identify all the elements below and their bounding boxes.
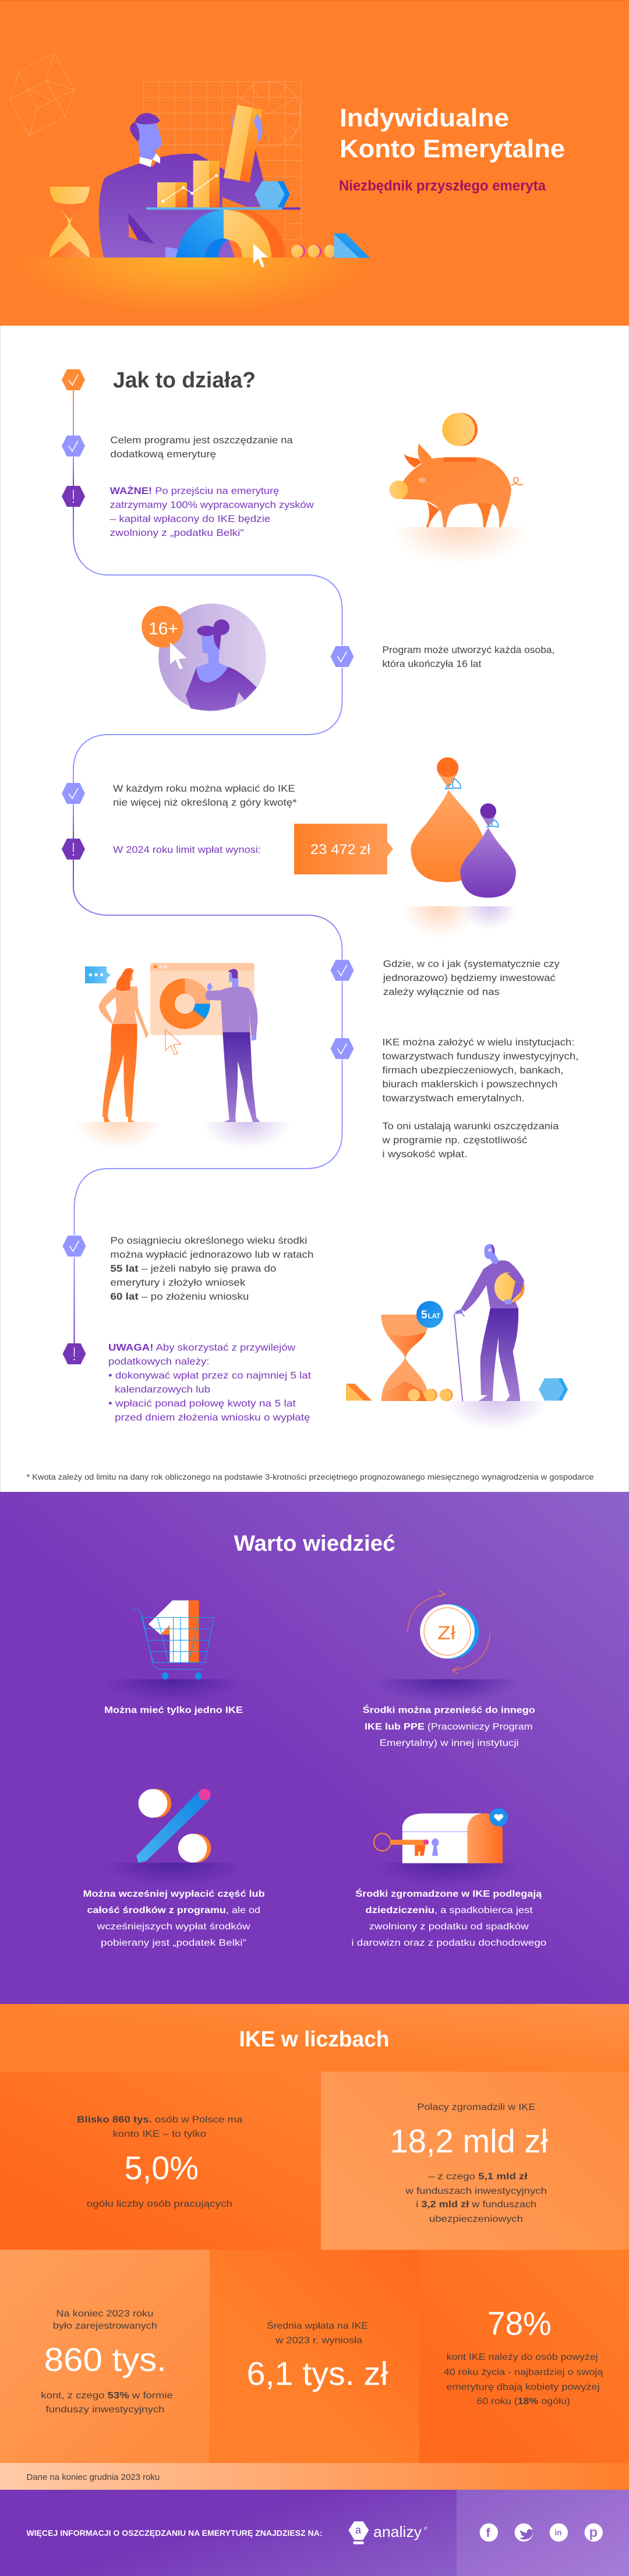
- cell: 18,2 mld zł: w funduszach inwestycyjnych: [405, 2186, 547, 2196]
- cell: 860 tys.: [0, 2250, 210, 2463]
- icon: check: [331, 646, 354, 667]
- cell: 78%: kont IKE należy do osób powyżej: [447, 2352, 598, 2362]
- cell: 6,1 tys. zł: w 2023 r. wyniosła: [275, 2336, 362, 2346]
- icon: chest with key: [373, 1808, 521, 1910]
- icon: check: [63, 1236, 86, 1257]
- text: limit: nie więcej niż określoną z góry kwotę*: [113, 797, 297, 808]
- cell: 5,0%: ogółu liczby osób pracujących: [87, 2199, 232, 2209]
- cell: 18,2 mld zł: i 3,2 mld zł w funduszach: [416, 2200, 536, 2210]
- text: cel programu: dodatkową emeryturę: [110, 449, 216, 460]
- icon: linkedin: [550, 2524, 568, 2542]
- text: gdzie inwestować: Gdzie, w co i jak (systematycznie czy: [383, 958, 560, 969]
- icon: coin transfer: [373, 1590, 521, 1726]
- source note: Dane na koniec grudnia 2023 roku: [27, 2472, 160, 2482]
- text: ważne: [110, 485, 314, 538]
- text: gdzie inwestować: zależy wyłącznie od nas: [383, 986, 500, 997]
- title: [340, 104, 565, 163]
- text: gdzie inwestować: jednorazowo) będziemy inwestować: [383, 972, 556, 983]
- cell: 78%: 60 roku ( 18% ogółu): [476, 2397, 570, 2406]
- icon: orange check hexagon: [62, 369, 85, 390]
- heading: Warto wiedzieć: [234, 1532, 395, 1556]
- header panel: [0, 0, 629, 373]
- cell: 860 tys.: Na koniec 2023 roku: [56, 2309, 153, 2319]
- text: gdzie inwestować: [383, 958, 560, 997]
- text: wypłata: emerytury i złożyło wniosek: [110, 1277, 246, 1288]
- text: instytucje: w programie np. częstotliwość: [381, 1135, 528, 1145]
- icon: number one in cart: [103, 1600, 245, 1726]
- icon: pinterest: [585, 2524, 603, 2542]
- heading: IKE w liczbach: [239, 2027, 389, 2052]
- text: transfer: Emerytalny) w innej instytucji: [380, 1738, 519, 1748]
- cell: 860 tys.: kont, z czego 53% w formie: [41, 2391, 173, 2401]
- text: wcześniejsza wypłata: całość środków z programu , ale od: [87, 1905, 260, 1915]
- cell: 78%: 78%: [487, 2305, 552, 2342]
- text: wypłata: 55 lat – jeżeli nabyło się prawa do: [110, 1263, 276, 1274]
- text: wcześniejsza wypłata: wcześniejszych wypłat środków: [96, 1922, 251, 1932]
- cell: 78%: 40 roku życia - najbardziej o swoją: [444, 2367, 603, 2377]
- illustration: woman 16+: [142, 604, 266, 711]
- text: kto może utworzyć: [382, 644, 554, 669]
- text: transfer: Środki można przenieść do innego: [363, 1705, 535, 1716]
- badge label 16+: 16+: [149, 619, 178, 638]
- badge label 5 lat: 5LAT: [421, 1309, 440, 1321]
- text: instytucje: towarzystwach emerytalnych.: [382, 1093, 525, 1104]
- logo: analizy.pl: a: [355, 2524, 362, 2536]
- text: dziedziczenie: zwolniony z podatku od spadków: [369, 1922, 529, 1932]
- cell: 18,2 mld zł: Polacy zgromadzili w IKE: [417, 2102, 535, 2112]
- text: instytucje: To oni ustalają warunki oszczędzania: [382, 1120, 559, 1131]
- text: wcześniejsza wypłata: [83, 1889, 265, 1948]
- text: dziedziczenie: [351, 1889, 546, 1948]
- icon: check: [331, 960, 354, 981]
- illustration: investor with charts: [99, 105, 301, 267]
- cell: 5,0%: konto IKE – to tylko: [113, 2129, 206, 2139]
- text: instytucje: biurach maklerskich i powszechnych: [382, 1079, 557, 1089]
- footer text: WIĘCEJ INFORMACJI O OSZCZĘDZANIU NA EMERYTURĘ ZNAJDZIESZ NA:: [27, 2528, 323, 2538]
- icon: twitter: [515, 2524, 534, 2542]
- logo: analizy.pl: [348, 2521, 427, 2545]
- source note: [0, 2463, 629, 2490]
- icon: percent: [103, 1788, 245, 1910]
- text: wypłata: [110, 1235, 313, 1302]
- text: uwaga: • wpłacić ponad połowę kwoty na 5 lat: [108, 1398, 296, 1409]
- text: uwaga: kalendarzowych lub: [115, 1384, 210, 1395]
- icon: exclamation: [62, 486, 85, 507]
- timeline connector: [73, 390, 342, 1343]
- text: instytucje: firmach ubezpieczeniowych, bankach,: [382, 1064, 563, 1075]
- panel: warto wiedzieć: [0, 1492, 629, 2004]
- text: dziedziczenie: dziedziczeniu , a spadkobierca jest: [366, 1905, 533, 1915]
- illustration: coins and prism: [291, 234, 370, 258]
- cell: 78%: emeryturę dbają kobiety powyżej: [447, 2383, 600, 2392]
- text: ważne: WAŻNE! Po przejściu na emeryturę: [110, 485, 279, 496]
- text: limit 2024: W 2024 roku limit wpłat wynosi:: [113, 844, 261, 855]
- text: dziedziczenie: Środki zgromadzone w IKE podlegają: [355, 1889, 542, 1899]
- text: wypłata: można wypłacić jednorazowo lub w ratach: [110, 1249, 313, 1260]
- callout: 23 472 zł: 23 472 zł: [310, 842, 371, 858]
- icon: facebook: f: [486, 2526, 490, 2540]
- cell: 18,2 mld zł: 18,2 mld zł: [390, 2123, 548, 2160]
- text: cel programu: Celem programu jest oszczędzanie na: [110, 435, 293, 446]
- icon: check: [331, 1038, 354, 1059]
- text: wypłata: 60 lat – po złożeniu wniosku: [110, 1291, 249, 1302]
- title: Indywidualne: [340, 104, 509, 132]
- text: uwaga: UWAGA! Aby skorzystać z przywilejów: [108, 1342, 296, 1353]
- text: wypłata: Po osiągnieciu określonego wieku środki: [110, 1235, 307, 1246]
- cell: 6,1 tys. zł: 6,1 tys. zł: [247, 2355, 388, 2392]
- text: instytucje: [381, 1037, 578, 1160]
- text: limit: [113, 783, 297, 808]
- cell: 860 tys.: było zarejestrowanych: [53, 2321, 157, 2331]
- illustration: floor glow: [12, 257, 373, 373]
- text: kto może utworzyć: która ukończyła 16 lat: [382, 658, 482, 669]
- callout: 23 472 zł: [294, 824, 393, 874]
- icon: check: [62, 436, 85, 457]
- text: cel programu: [110, 435, 293, 460]
- text: instytucje: IKE można założyć w wielu instytucjach:: [382, 1037, 574, 1048]
- text: uwaga: przed dniem złożenia wniosku o wypłatę: [115, 1412, 310, 1423]
- cell: 5,0%: [0, 2072, 321, 2250]
- text: dziedziczenie: i darowizn oraz z podatku dochodowego: [351, 1938, 546, 1948]
- illustration: two people at chart: [75, 963, 291, 1176]
- illustration: senior with hourglass: [346, 1244, 568, 1459]
- heading: Jak to działa?: [113, 368, 256, 393]
- logo: analizy.pl: analizy: [373, 2523, 422, 2540]
- icon: check: [62, 783, 85, 804]
- text: uwaga: [108, 1342, 311, 1423]
- cell: 6,1 tys. zł: Średnia wpłata na IKE: [267, 2320, 368, 2331]
- icon: pinterest: p: [589, 2525, 598, 2540]
- panel: jak to działa: [0, 326, 629, 1492]
- icon: exclamation: [62, 839, 85, 860]
- text: transfer: [363, 1705, 535, 1748]
- cell: 18,2 mld zł: [321, 2072, 629, 2250]
- footer: [0, 2490, 629, 2576]
- text: ważne: – kapitał wpłacony do IKE będzie: [110, 513, 270, 524]
- text: limit: W każdym roku można wpłacić do IKE: [113, 783, 295, 794]
- text: ważne: zatrzymamy 100% wypracowanych zysków: [110, 499, 314, 510]
- cell: 6,1 tys. zł: [210, 2250, 419, 2463]
- text: kto może utworzyć: Program może utworzyć każda osoba,: [382, 644, 554, 655]
- text: instytucje: i wysokość wpłat.: [382, 1149, 467, 1160]
- cell: 18,2 mld zł: ubezpieczeniowych: [429, 2214, 523, 2224]
- cell: 860 tys.: 860 tys.: [44, 2341, 167, 2379]
- illustration: wireframe cube, grid and clock: [10, 53, 301, 239]
- subtitle: Niezbędnik przyszłego emeryta: [339, 178, 546, 194]
- text: wcześniejsza wypłata: pobierany jest „podatek Belki”: [101, 1938, 246, 1948]
- footnote: * Kwota zależy od limitu na dany rok obliczonego na podstawie 3-krotności przeciętnego prognozowanego miesięcznego wynagrodzenia w gospodarce: [27, 1473, 594, 1481]
- text: transfer: IKE lub PPE (Pracowniczy Program: [365, 1722, 533, 1732]
- title: Konto Emerytalne: [340, 135, 565, 163]
- text: wcześniejsza wypłata: Można wcześniej wypłacić część lub: [83, 1889, 265, 1899]
- cell: 5,0%: Blisko 860 tys. osób w Polsce ma: [77, 2115, 242, 2125]
- text: uwaga: • dokonywać wpłat przez co najmniej 5 lat: [108, 1370, 311, 1381]
- text: uwaga: podatkowych należy:: [108, 1356, 210, 1367]
- cell: 78%: [419, 2250, 629, 2463]
- icon: linkedin: in: [554, 2528, 561, 2537]
- illustration: piggy bank: [389, 413, 530, 601]
- icon: exclamation: [63, 1343, 86, 1364]
- cell: 860 tys.: funduszy inwestycyjnych: [45, 2405, 164, 2415]
- illustration: hourglass: [50, 187, 90, 257]
- cell: 5,0%: 5,0%: [125, 2150, 199, 2187]
- icon: facebook: [480, 2524, 498, 2542]
- illustration: money bags: [401, 757, 518, 971]
- text: ważne: zwolniony z „podatku Belki”: [110, 527, 244, 538]
- coin label: Zł: [437, 1622, 455, 1643]
- text: instytucje: towarzystwach funduszy inwestycyjnych,: [382, 1051, 578, 1062]
- logo: analizy.pl: pl: [424, 2526, 427, 2531]
- panel: IKE w liczbach: [0, 2004, 629, 2490]
- cell: 18,2 mld zł: – z czego 5,1 mld zł: [429, 2172, 528, 2182]
- text: jedno IKE: Można mieć tylko jedno IKE: [104, 1706, 243, 1716]
